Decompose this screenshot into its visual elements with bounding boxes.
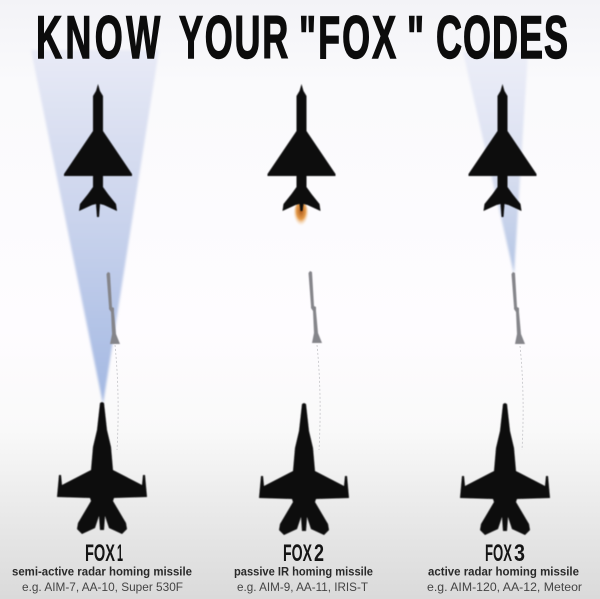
launching jet: FOX 2 <box>259 403 349 535</box>
title <box>36 5 568 71</box>
panel: FOX 1 <box>12 84 192 594</box>
title: KNOW <box>36 5 160 71</box>
label: FOX 2: FOX <box>283 540 312 567</box>
target jet: FOX 1 <box>64 84 132 217</box>
examples: FOX 3: e.g. AIM-120, AA-12, Meteor <box>427 582 582 594</box>
radar beam: FOX 3 <box>463 52 528 274</box>
description: FOX 2: passive IR homing missile <box>234 566 373 578</box>
title: "FOX <box>299 5 396 71</box>
description: FOX 1: semi-active radar homing missile <box>12 566 192 578</box>
examples: FOX 1: e.g. AIM-7, AA-10, Super 530F <box>22 582 183 594</box>
missile trail: FOX 1 <box>115 345 118 450</box>
title: YOUR <box>179 5 288 71</box>
missile: FOX 2 <box>308 271 322 343</box>
label: FOX 2: 2 <box>314 540 324 567</box>
title: CODES <box>436 5 568 71</box>
panel: FOX 3 <box>427 84 582 594</box>
launching jet: FOX 1 <box>57 402 147 534</box>
missile: FOX 3 <box>512 272 525 344</box>
missile trail: FOX 2 <box>317 345 320 450</box>
title: " <box>407 5 424 71</box>
examples: FOX 2: e.g. AIM-9, AA-11, IRIS-T <box>237 582 368 594</box>
missile trail: FOX 3 <box>520 346 523 450</box>
target jet: FOX 3 <box>468 84 536 217</box>
description: FOX 3: active radar homing missile <box>428 566 579 578</box>
label: FOX 1: FOX <box>85 540 115 567</box>
label: FOX 3: FOX <box>485 540 512 567</box>
target jet: FOX 2 <box>268 84 336 211</box>
launching jet: FOX 3 <box>460 403 550 535</box>
missile: FOX 1 <box>106 272 120 344</box>
radar beam: FOX 1 <box>31 50 159 404</box>
label: FOX 3: 3 <box>514 540 525 567</box>
engine flame <box>294 201 308 229</box>
panel: FOX 1: 1 <box>117 540 123 567</box>
panel: FOX 2 <box>234 84 373 594</box>
